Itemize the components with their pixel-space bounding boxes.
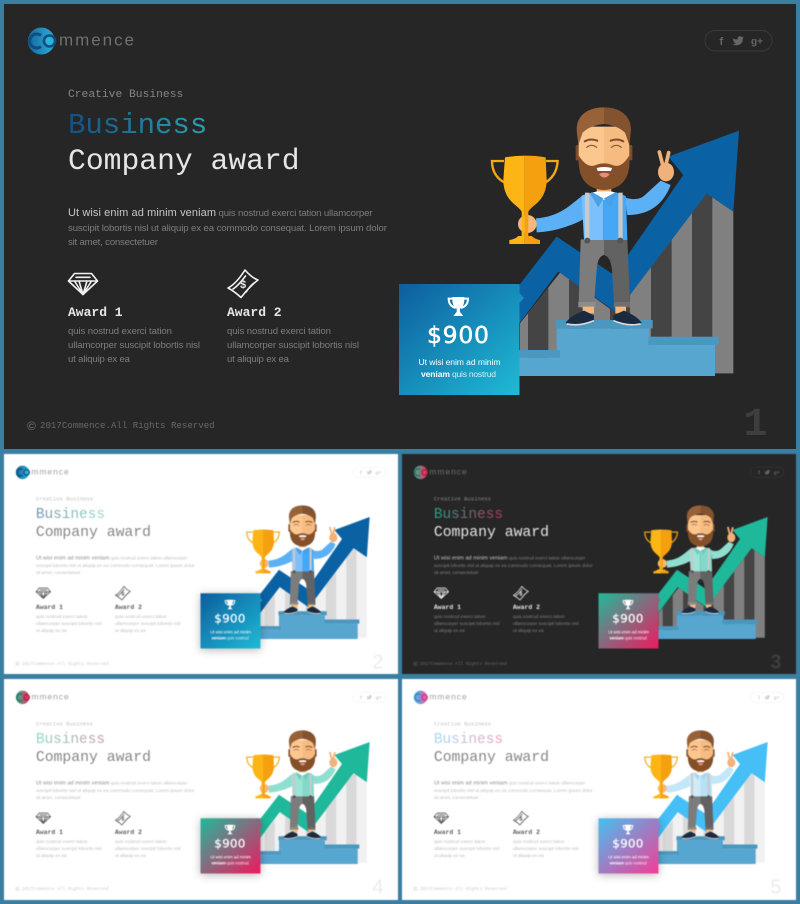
bar chart backdrop <box>659 772 765 864</box>
award 2 text: quis nostrud exerci tation <box>227 326 331 337</box>
intro paragraph: Ut wisi enim ad minim veniam <box>36 555 110 561</box>
social icons: g+ <box>376 696 382 701</box>
character <box>518 107 674 326</box>
prize card <box>399 284 524 395</box>
prize card: veniam <box>421 369 450 379</box>
panel: slide 1 dark blue <box>4 4 796 449</box>
prize card: Ut wisi enim ad minim <box>608 855 649 860</box>
award 1 text <box>68 305 200 365</box>
intro paragraph: suscipit lobortis nisl ut aliquip ex ea commodo consequat. Lorem ipsum dolor <box>434 563 593 569</box>
icon: money note <box>115 811 130 825</box>
social icons <box>751 692 784 702</box>
intro paragraph <box>36 780 195 801</box>
award 1 text: Award 1 <box>434 829 461 836</box>
icon: diamond <box>36 813 51 824</box>
award 2 text <box>513 604 579 634</box>
award 2 text: ullamcorper suscipit lobortis nisl <box>227 340 359 351</box>
brand name: mmence <box>31 692 69 702</box>
award 1 text <box>36 829 102 859</box>
prize card: quis nostrud <box>452 369 496 379</box>
copyright: 2017Commence.All Rights Reserved <box>420 661 507 667</box>
intro paragraph <box>434 780 593 801</box>
intro paragraph: quis nostrud exerci tation ullamcorper <box>111 780 188 786</box>
character <box>260 730 337 839</box>
award 1 text: ut aliquip ex ea <box>434 628 465 634</box>
eyebrow text: Creative Business <box>434 720 491 727</box>
arrow rising <box>519 131 739 323</box>
copyright: 2017Commence.All Rights Reserved <box>22 886 109 892</box>
prize card: $900 <box>214 612 245 626</box>
slide number: 1 <box>743 403 768 448</box>
slide number: 5 <box>770 876 781 898</box>
intro paragraph: Ut wisi enim ad minim veniam <box>36 780 110 786</box>
award 2 text: Award 2 <box>513 604 540 611</box>
social icons: f <box>758 695 760 701</box>
intro paragraph <box>434 555 593 576</box>
icon: money note <box>115 586 130 600</box>
award 2 text: quis nostrud exerci tation <box>513 839 565 845</box>
social icons: f <box>360 470 362 476</box>
copyright: © <box>413 886 418 893</box>
award 2 text: ut aliquip ex ea <box>227 354 290 365</box>
brand name: mmence <box>429 467 467 477</box>
award 1 text: ullamcorper suscipit lobortis nisl <box>68 340 200 351</box>
prize card: Ut wisi enim ad minim <box>608 630 649 635</box>
panel: slide 5 light blue-pink <box>402 679 796 900</box>
prize card: quis nostrud <box>625 861 647 866</box>
award 1 text: ut aliquip ex ea <box>36 628 67 634</box>
award 2 text: quis nostrud exerci tation <box>115 614 167 620</box>
intro paragraph: quis nostrud exerci tation ullamcorper <box>218 208 373 219</box>
social icons: g+ <box>774 696 780 701</box>
icon: money note: $ <box>519 591 522 597</box>
copyright: 2017Commence.All Rights Reserved <box>40 420 215 431</box>
heading: business: Business <box>68 109 207 142</box>
intro paragraph: sit amet, consectetuer <box>36 570 81 576</box>
panel: slide 2 light blue <box>4 454 398 674</box>
icon: gold trophy <box>492 156 558 244</box>
heading: business: Business <box>434 732 503 748</box>
copyright <box>413 886 507 893</box>
panel: slide 3 dark green-pink <box>402 454 796 674</box>
podium steps <box>260 611 359 639</box>
copyright <box>413 661 507 668</box>
social icons: g+ <box>376 471 382 476</box>
copyright: 2017Commence.All Rights Reserved <box>22 661 109 667</box>
intro paragraph: quis nostrud exerci tation ullamcorper <box>509 555 586 561</box>
heading: business: Business <box>36 732 105 748</box>
bar chart backdrop <box>261 547 367 639</box>
award 2 text: quis nostrud exerci tation <box>513 614 565 620</box>
prize card: quis nostrud <box>625 636 647 641</box>
prize card: $900 <box>612 837 643 851</box>
arrow rising <box>658 517 768 613</box>
bar chart backdrop <box>659 547 765 639</box>
award 1 text: quis nostrud exerci tation <box>36 614 88 620</box>
social icons: f <box>360 695 362 701</box>
award 1 text: Award 1 <box>36 829 63 836</box>
eyebrow text: Creative Business <box>68 89 183 101</box>
heading: company award: Company award <box>36 525 151 541</box>
award 1 text <box>36 604 102 634</box>
intro paragraph: suscipit lobortis nisl ut aliquip ex ea commodo consequat. Lorem ipsum dolor <box>36 563 195 569</box>
heading: company award: Company award <box>434 750 549 766</box>
intro paragraph: sit amet, consectetuer <box>36 795 81 801</box>
icon: diamond <box>68 274 98 294</box>
prize card: veniam <box>211 636 226 641</box>
award 1 text <box>434 604 500 634</box>
award 1 text: ullamcorper suscipit lobortis nisl <box>434 846 500 852</box>
bar chart backdrop <box>520 190 733 376</box>
intro paragraph: sit amet, consectetuer <box>434 795 479 801</box>
icon: gold trophy <box>645 529 677 573</box>
intro paragraph: Ut wisi enim ad minim veniam <box>434 780 508 786</box>
intro paragraph: suscipit lobortis nisl ut aliquip ex ea commodo consequat. Lorem ipsum dolor <box>36 788 195 794</box>
brand name: mmence <box>31 467 69 477</box>
award 1 text: Award 1 <box>68 305 123 320</box>
icon: money note <box>513 586 528 600</box>
social icons: f <box>758 470 760 476</box>
icon: gold trophy <box>247 754 279 798</box>
icon: commence logo <box>16 691 29 704</box>
award 1 text: quis nostrud exerci tation <box>434 614 486 620</box>
slide number: 3 <box>770 651 781 673</box>
eyebrow text: Creative Business <box>36 495 93 502</box>
award 2 text: ut aliquip ex ea <box>513 853 544 859</box>
award 2 text: ullamcorper suscipit lobortis nisl <box>115 846 181 852</box>
eyebrow text: Creative Business <box>434 495 491 502</box>
podium steps <box>260 836 359 864</box>
award 1 text: quis nostrud exerci tation <box>36 839 88 845</box>
prize card: Ut wisi enim ad minim <box>210 630 251 635</box>
award 2 text: Award 2 <box>227 305 282 320</box>
icon: money note <box>513 811 528 825</box>
prize card: Ut wisi enim ad minim <box>418 357 500 367</box>
prize card: $900 <box>612 612 643 626</box>
award 1 text <box>434 829 500 859</box>
intro paragraph: sit amet, consectetuer <box>68 237 159 248</box>
prize card: veniam <box>609 636 624 641</box>
award 2 text: Award 2 <box>513 829 540 836</box>
bar chart backdrop <box>261 772 367 864</box>
arrow rising <box>658 742 768 838</box>
copyright: © <box>413 661 418 668</box>
award 1 text: ullamcorper suscipit lobortis nisl <box>36 846 102 852</box>
social icons: g+ <box>774 471 780 476</box>
prize card <box>201 593 263 649</box>
award 2 text: ullamcorper suscipit lobortis nisl <box>513 846 579 852</box>
prize card <box>599 818 661 874</box>
award 2 text <box>115 604 181 634</box>
intro paragraph: suscipit lobortis nisl ut aliquip ex ea commodo consequat. Lorem ipsum dolor <box>434 788 593 794</box>
podium steps <box>658 836 757 864</box>
arrow rising <box>260 517 370 613</box>
heading: business: Business <box>434 507 503 523</box>
icon: diamond <box>36 588 51 599</box>
heading: company award: Company award <box>36 750 151 766</box>
podium steps <box>658 611 757 639</box>
award 1 text: Award 1 <box>434 604 461 611</box>
intro paragraph: Ut wisi enim ad minim veniam <box>68 207 216 219</box>
eyebrow text: Creative Business <box>36 720 93 727</box>
heading: business: Business <box>36 507 105 523</box>
award 2 text: quis nostrud exerci tation <box>115 839 167 845</box>
icon: commence logo <box>414 466 427 479</box>
slide number: 4 <box>372 876 383 898</box>
intro paragraph <box>36 555 195 576</box>
icon: gold trophy <box>247 529 279 573</box>
intro paragraph: quis nostrud exerci tation ullamcorper <box>509 780 586 786</box>
award 2 text: Award 2 <box>115 604 142 611</box>
prize card <box>201 818 263 874</box>
award 1 text: ullamcorper suscipit lobortis nisl <box>434 621 500 627</box>
icon: commence logo <box>28 28 55 54</box>
copyright: 2017Commence.All Rights Reserved <box>420 886 507 892</box>
prize card: quis nostrud <box>227 636 249 641</box>
intro paragraph: Ut wisi enim ad minim veniam <box>434 555 508 561</box>
prize card: $900 <box>427 321 489 349</box>
intro paragraph: sit amet, consectetuer <box>434 570 479 576</box>
award 2 text: ut aliquip ex ea <box>115 628 146 634</box>
icon: money note: $ <box>121 816 124 822</box>
prize card: veniam <box>609 861 624 866</box>
social icons: f <box>720 36 724 48</box>
award 2 text: ullamcorper suscipit lobortis nisl <box>513 621 579 627</box>
copyright: © <box>27 419 36 433</box>
character <box>260 505 337 614</box>
award 2 text: Award 2 <box>115 829 142 836</box>
prize card: $900 <box>214 837 245 851</box>
icon: money note: $ <box>240 279 246 291</box>
icon: gold trophy <box>645 754 677 798</box>
award 1 text: quis nostrud exerci tation <box>68 326 172 337</box>
award 1 text: Award 1 <box>36 604 63 611</box>
social icons <box>353 467 386 477</box>
icon: commence logo <box>16 466 29 479</box>
award 2 text <box>227 305 359 365</box>
prize card: veniam <box>211 861 226 866</box>
character <box>658 730 735 839</box>
prize card: quis nostrud <box>227 861 249 866</box>
award 1 text: ut aliquip ex ea <box>434 853 465 859</box>
icon: diamond <box>434 588 449 599</box>
social icons <box>751 467 784 477</box>
heading: company award: Company award <box>434 525 549 541</box>
slide number: 2 <box>372 651 383 673</box>
award 2 text: ut aliquip ex ea <box>115 853 146 859</box>
prize card: Ut wisi enim ad minim <box>210 855 251 860</box>
award 1 text: ut aliquip ex ea <box>68 354 131 365</box>
social icons: g+ <box>751 36 763 48</box>
award 2 text: ut aliquip ex ea <box>513 628 544 634</box>
icon: commence logo <box>414 691 427 704</box>
character <box>658 505 735 614</box>
copyright: © <box>15 886 20 893</box>
arrow rising <box>260 742 370 838</box>
heading: company award: Company award <box>68 144 300 178</box>
copyright: © <box>15 661 20 668</box>
icon: money note <box>228 270 258 298</box>
podium steps <box>519 320 718 376</box>
intro paragraph: suscipit lobortis nisl ut aliquip ex ea commodo consequat. Lorem ipsum dolor <box>68 223 388 234</box>
award 2 text: ullamcorper suscipit lobortis nisl <box>115 621 181 627</box>
social icons <box>353 692 386 702</box>
copyright <box>15 661 109 668</box>
panel: slide 4 light green-pink <box>4 679 398 900</box>
award 2 text <box>513 829 579 859</box>
prize card <box>599 593 661 649</box>
icon: money note: $ <box>519 816 522 822</box>
intro paragraph: quis nostrud exerci tation ullamcorper <box>111 555 188 561</box>
social icons <box>705 30 772 51</box>
brand name: mmence <box>429 692 467 702</box>
brand name: mmence <box>59 30 134 50</box>
intro paragraph <box>68 207 388 248</box>
copyright <box>15 886 109 893</box>
icon: diamond <box>434 813 449 824</box>
award 2 text <box>115 829 181 859</box>
icon: money note: $ <box>121 591 124 597</box>
award 1 text: ullamcorper suscipit lobortis nisl <box>36 621 102 627</box>
award 1 text: ut aliquip ex ea <box>36 853 67 859</box>
award 1 text: quis nostrud exerci tation <box>434 839 486 845</box>
